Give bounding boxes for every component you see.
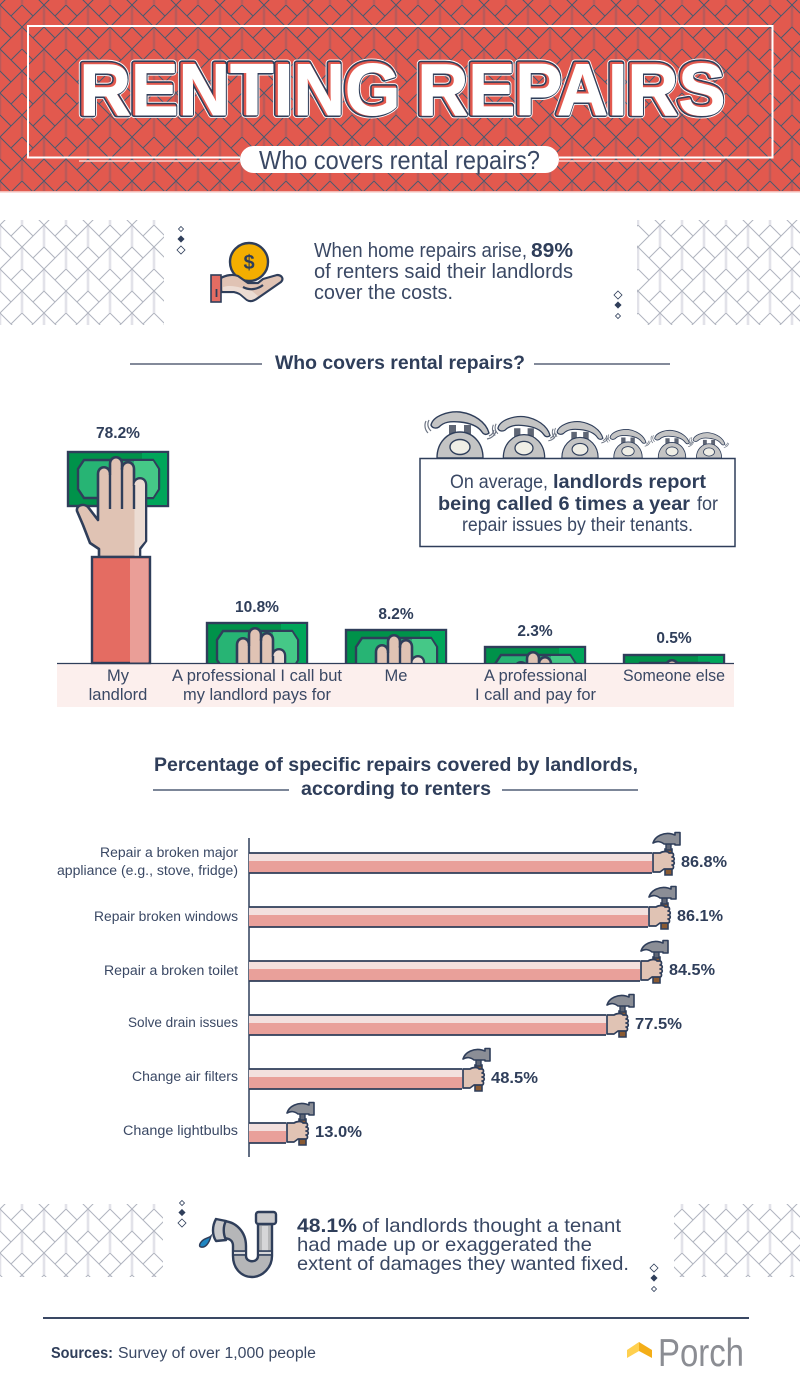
callout: landlord calls: being called 6 times a year <box>438 494 691 515</box>
pattern: bottom left <box>0 1204 163 1277</box>
bottom text: 48.1% <box>297 1215 357 1237</box>
row: broken toilet: 84.5% <box>669 962 715 979</box>
diamonds: intro left <box>177 226 185 254</box>
row: lightbulbs: 13.0% <box>315 1124 362 1141</box>
row: major appliance: appliance (e.g., stove, fridge) <box>57 863 238 878</box>
icon: leaky pipe <box>200 1212 276 1277</box>
bar labels: A professional I call but <box>172 667 342 685</box>
title: REPAIRS <box>418 50 726 131</box>
bar: professional, landlord pays: 10.8% <box>235 599 279 616</box>
title: REPAIRS <box>416 49 724 130</box>
subtitle pill: Who covers rental repairs? <box>259 145 540 175</box>
pattern: intro right <box>637 220 800 325</box>
bar labels: A professional <box>484 667 587 685</box>
label band <box>57 664 734 707</box>
sources: Sources: <box>51 1345 113 1362</box>
row: drain issues <box>128 994 682 1037</box>
bottom text: of landlords thought a tenant <box>362 1215 622 1237</box>
footer rule <box>43 1317 749 1319</box>
icon: ringing phones <box>425 412 729 458</box>
row: broken windows <box>94 886 723 929</box>
bar labels <box>89 667 725 704</box>
row: drain issues: 77.5% <box>635 1016 682 1033</box>
pattern: bottom right <box>674 1204 800 1277</box>
row: broken toilet <box>104 940 715 983</box>
intro text: 89% <box>531 240 573 262</box>
intro text: cover the costs. <box>314 282 453 304</box>
callout: landlord calls: On average, <box>450 472 548 493</box>
logo: Porch <box>627 1332 744 1375</box>
heading: percentage of repairs: Percentage of specific repairs covered by landlords, <box>154 755 638 776</box>
bar labels: landlord <box>89 686 147 704</box>
diamonds: intro right <box>614 291 622 318</box>
bar: someone else <box>622 632 726 663</box>
icon: coin in hand <box>211 243 282 302</box>
bar: professional, landlord pays <box>206 601 308 663</box>
heading: percentage of repairs: according to renters <box>301 779 491 800</box>
bar: me <box>344 608 448 663</box>
bar labels: I call and pay for <box>475 686 596 704</box>
title: REPAIRS <box>416 49 724 130</box>
logo: Porch: Porch <box>658 1332 744 1375</box>
row: major appliance <box>57 832 727 878</box>
row: drain issues: Solve drain issues <box>128 1015 238 1030</box>
row: broken toilet: Repair a broken toilet <box>104 963 238 978</box>
bottom text: had made up or exaggerated the <box>297 1234 592 1256</box>
diamonds: bottom left <box>178 1200 186 1227</box>
title: RENTING <box>78 49 399 130</box>
bottom text: extent of damages they wanted fixed. <box>297 1253 629 1275</box>
sources: Survey of over 1,000 people <box>118 1345 316 1362</box>
header banner <box>0 0 800 192</box>
row: broken windows: Repair broken windows <box>94 909 238 924</box>
heading: who covers: Who covers rental repairs? <box>275 353 525 374</box>
bar labels: Me <box>385 667 407 685</box>
bar labels: Someone else <box>623 667 725 685</box>
title <box>78 49 726 131</box>
row: broken windows: 86.1% <box>677 908 723 925</box>
callout: landlord calls <box>420 458 735 546</box>
diamonds: bottom right <box>650 1264 658 1292</box>
row: major appliance: Repair a broken major <box>100 845 239 860</box>
heading: percentage of repairs <box>153 755 638 800</box>
title: RENTING <box>78 49 399 130</box>
row: air filters <box>132 1048 538 1091</box>
icon: coin in hand: $ <box>243 252 255 274</box>
title: RENTING <box>80 50 400 131</box>
bar: my landlord <box>68 425 168 663</box>
intro text: of renters said their landlords <box>314 261 573 283</box>
row: lightbulbs: Change lightbulbs <box>123 1123 238 1138</box>
callout: landlord calls: landlords report <box>553 472 707 493</box>
bottom text <box>297 1215 629 1275</box>
horizontal axis line <box>248 838 250 1157</box>
bar: professional, self pays <box>484 625 586 663</box>
callout: landlord calls: for <box>697 494 719 515</box>
pattern: intro left <box>0 220 164 325</box>
bar: my landlord: 78.2% <box>96 425 140 442</box>
intro text <box>314 240 573 304</box>
intro text: When home repairs arise, <box>314 240 527 262</box>
row: major appliance: 86.8% <box>681 854 727 871</box>
header frame <box>28 26 772 158</box>
bar: professional, self pays: 2.3% <box>517 623 553 640</box>
bar: someone else: 0.5% <box>656 630 692 647</box>
title: REPAIRS <box>416 49 724 130</box>
bar labels: My <box>107 667 130 685</box>
callout: landlord calls: repair issues by their tenants. <box>462 515 693 536</box>
title: RENTING <box>78 49 399 130</box>
bar: me: 8.2% <box>378 606 414 623</box>
bar labels: my landlord pays for <box>183 686 331 704</box>
row: air filters: 48.5% <box>491 1070 538 1087</box>
row: air filters: Change air filters <box>132 1069 238 1084</box>
row: lightbulbs <box>123 1102 362 1145</box>
